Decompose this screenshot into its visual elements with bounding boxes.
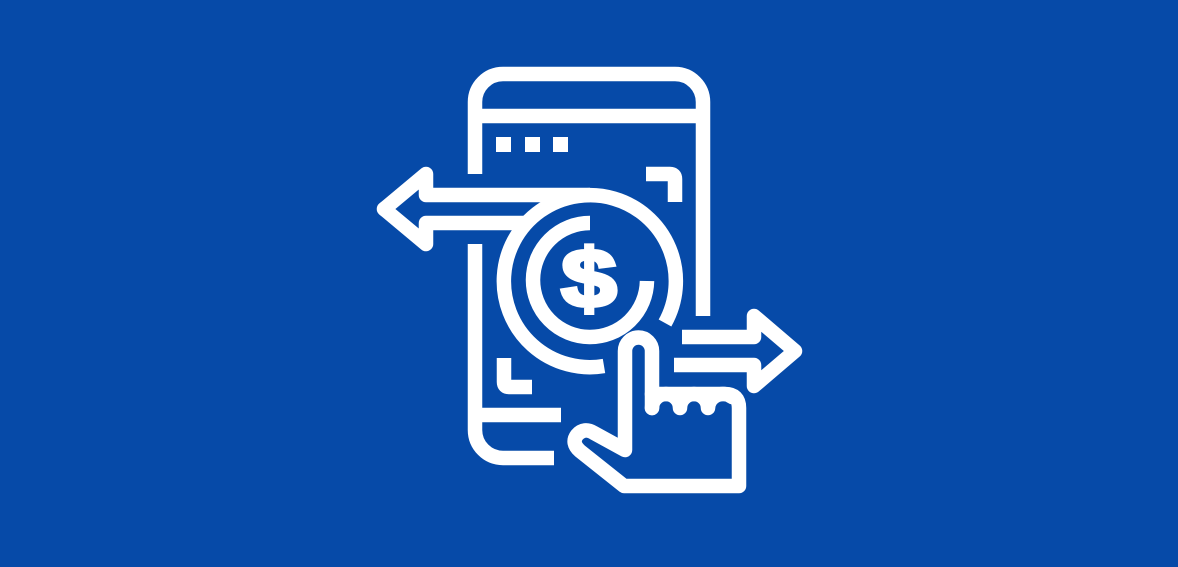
icon: bottom left scan corner <box>504 358 532 387</box>
icon: inner coin ring <box>533 223 647 337</box>
arrow: pointing left <box>384 174 590 244</box>
icon: three status dots <box>496 137 568 152</box>
icon: dollar sign: $ <box>561 233 617 325</box>
icon: top right scan corner <box>646 174 675 202</box>
icon: pointing hand <box>575 338 739 486</box>
icon: outer coin ring <box>504 195 676 367</box>
arrow: pointing right <box>674 316 795 386</box>
icon: smartphone outline <box>475 74 703 458</box>
